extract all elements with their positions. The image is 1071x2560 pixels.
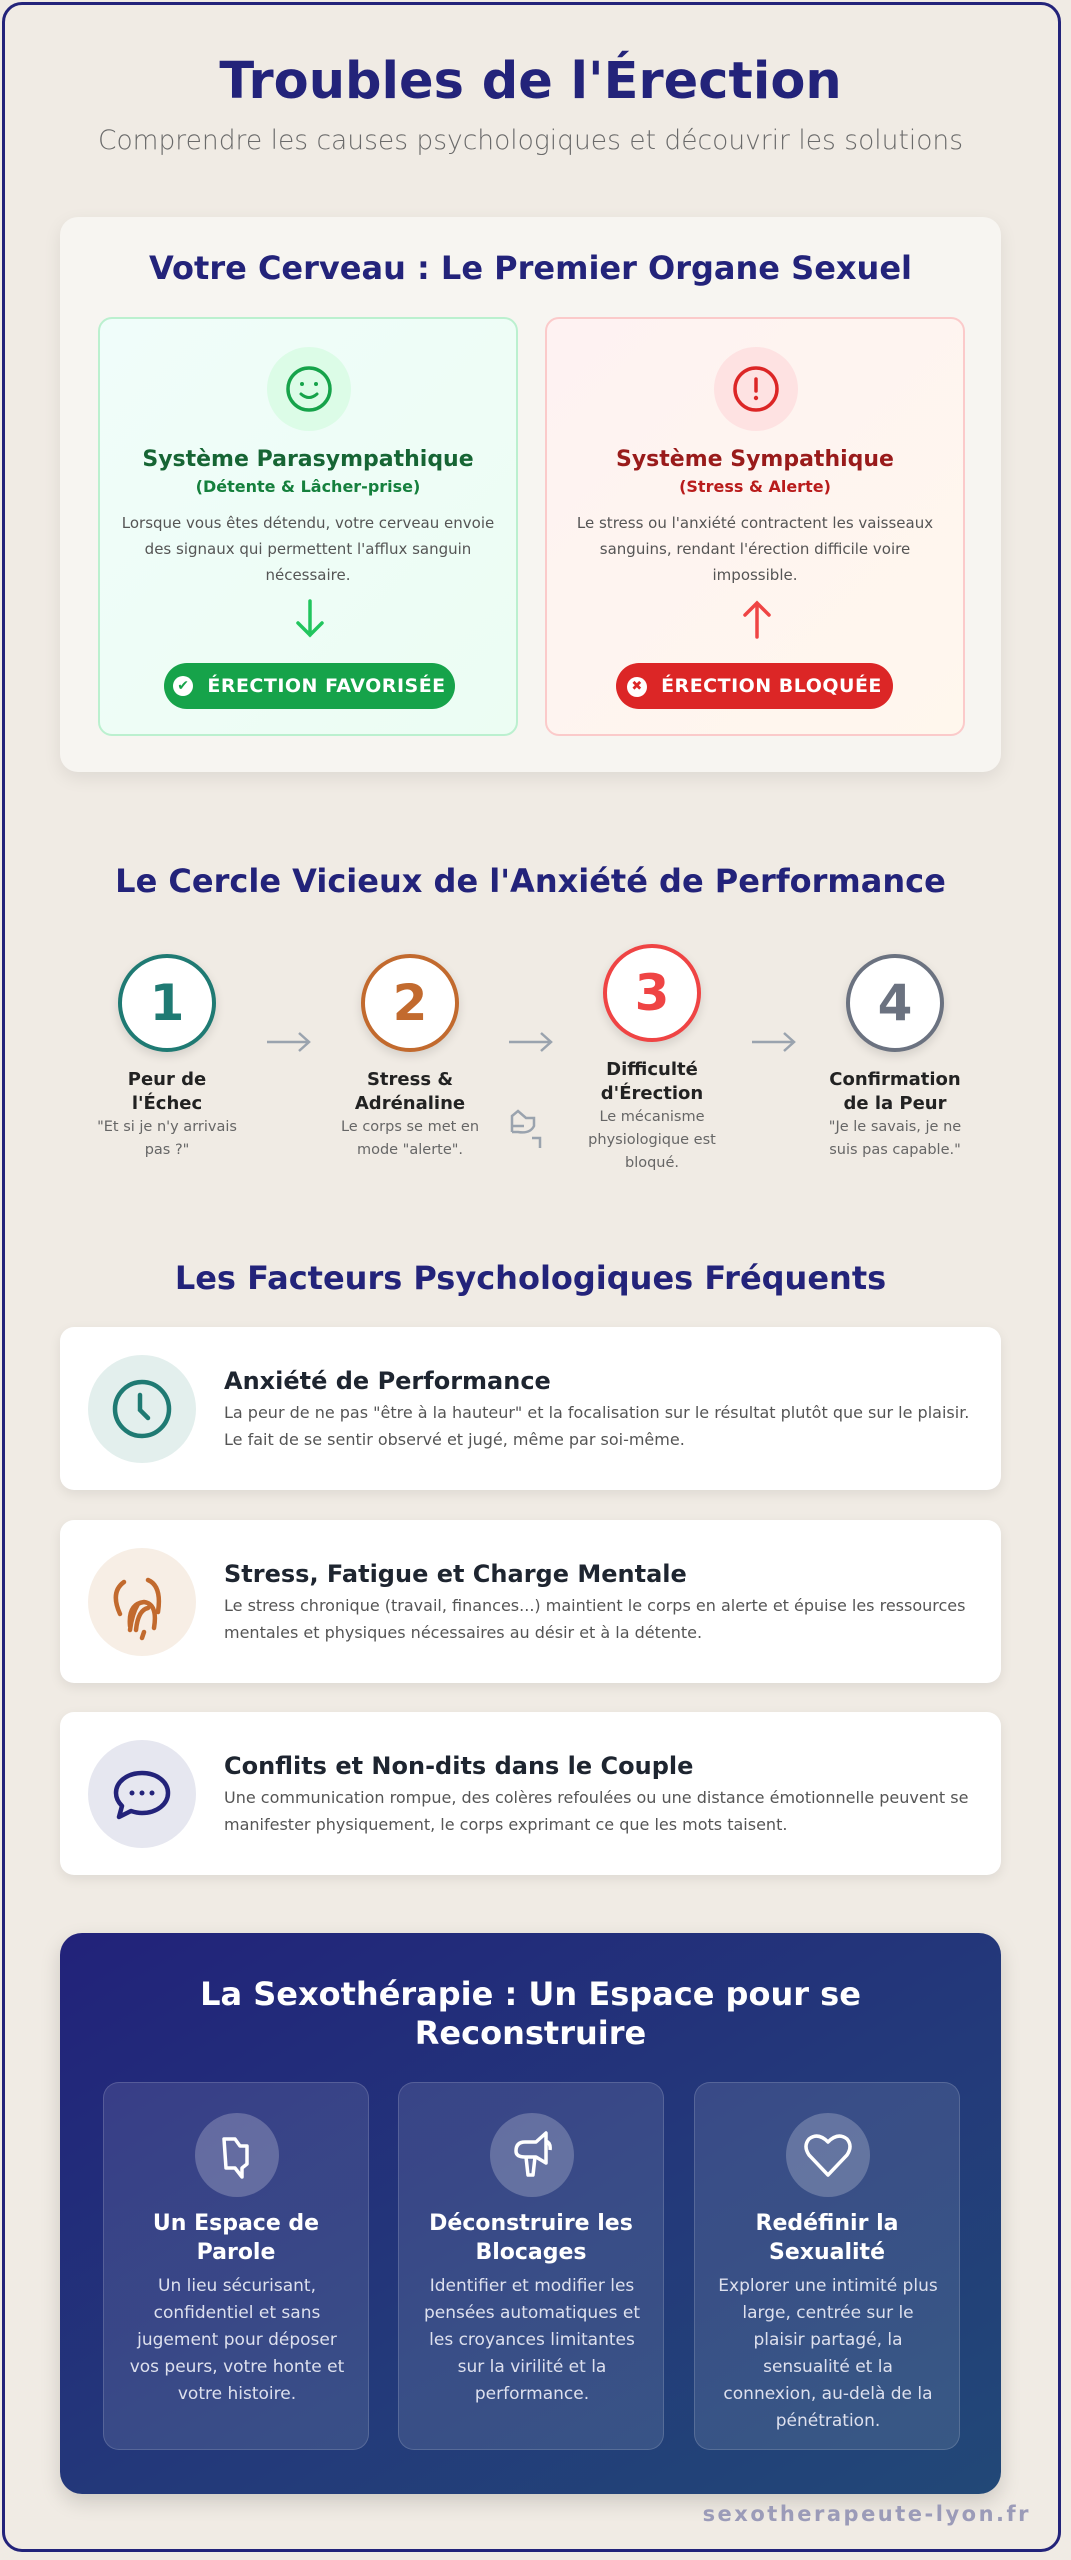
step 3: Le mécanisme physiologique est bloqué. (588, 1109, 716, 1171)
step 3: d'Érection (601, 1083, 703, 1104)
step 4: "Je le savais, je ne suis pas capable." (829, 1119, 961, 1158)
icon: smiley (267, 347, 351, 431)
button: favorisée: ÉRECTION FAVORISÉE (207, 675, 446, 697)
card: blocages: Identifier et modifier les pensées automatiques et les croyances limitantes sur la virilité et la performance. (424, 2276, 640, 2404)
factor card 1 (60, 1327, 1001, 1490)
text: sympathetic: (Stress & Alerte) (679, 477, 831, 496)
icon: alert (714, 347, 798, 431)
step 4: 4 (878, 974, 912, 1032)
icon: loop (510, 1110, 542, 1148)
arrow: up (743, 600, 771, 639)
heading: sexotherapy (200, 1975, 861, 2052)
text: parasympathetic: Lorsque vous êtes détendu, votre cerveau envoie des signaux qui permettent l'afflux sanguin nécessaire. (122, 514, 494, 584)
factor card 2 (60, 1520, 1001, 1683)
button: bloquée: ÉRECTION BLOQUÉE (661, 675, 882, 697)
step 3: Difficulté (606, 1059, 698, 1080)
step 2 (341, 954, 479, 1158)
factor card 2: Le stress chronique (travail, finances...) maintient le corps en alerte et épuise les ressources mentales et physiques nécessaires au désir et à la détente. (224, 1596, 965, 1642)
card: blocages: Blocages (475, 2240, 587, 2265)
panel: brain (60, 217, 1001, 772)
step 1: "Et si je n'y arrivais pas ?" (97, 1119, 237, 1158)
heading: sexotherapy: Reconstruire (415, 2014, 646, 2052)
factor card 2: Stress, Fatigue et Charge Mentale (224, 1560, 687, 1588)
icon: megaphone (490, 2113, 574, 2197)
footer: website: sexotherapeute-lyon.fr (703, 2502, 1031, 2526)
card: parole (103, 2082, 369, 2450)
step 2: Stress & (367, 1069, 453, 1090)
subtitle: Comprendre les causes psychologiques et découvrir les solutions (98, 125, 963, 156)
step 4: Confirmation (829, 1069, 961, 1090)
factor card 3: Conflits et Non-dits dans le Couple (224, 1752, 693, 1780)
icon: speech (195, 2113, 279, 2197)
title: Troubles de l'Érection (219, 52, 842, 111)
icon: chat (88, 1740, 196, 1848)
card: sexualité: Sexualité (769, 2240, 885, 2265)
step 1: 1 (150, 974, 184, 1032)
card: parole: Parole (197, 2240, 275, 2265)
text: sympathetic (577, 447, 933, 584)
text: sympathetic: Système Sympathique (616, 447, 894, 472)
factor card 1: La peur de ne pas "être à la hauteur" et la focalisation sur le résultat plutôt que sur le plaisir. Le fait de se sentir observé et jugé, même par soi-même. (224, 1403, 969, 1449)
card: sexualité: Redéfinir la (756, 2211, 898, 2236)
button: favorisée (164, 663, 455, 709)
card: parasympathetic (98, 317, 518, 736)
step 3 (588, 944, 716, 1171)
step 3: 3 (635, 964, 669, 1022)
heading: sexotherapy: La Sexothérapie : Un Espace pour se (200, 1975, 861, 2013)
card: sexualité (694, 2082, 960, 2450)
arrow 3 (752, 1032, 796, 1052)
icon: brain (88, 1548, 196, 1656)
step 1 (97, 954, 237, 1158)
icon: clock (88, 1355, 196, 1463)
button: favorisée: ✔ (177, 678, 189, 694)
factor card 3 (60, 1712, 1001, 1875)
card: blocages: Déconstruire les (429, 2211, 633, 2236)
card: sexualité: Explorer une intimité plus large, centrée sur le plaisir partagé, la sensualité et la connexion, au-delà de la pénétration. (718, 2276, 938, 2431)
step 2: Adrénaline (355, 1093, 465, 1114)
text: parasympathetic: (Détente & Lâcher-prise) (196, 477, 420, 496)
step 1: l'Échec (132, 1093, 202, 1114)
step 2: Le corps se met en mode "alerte". (341, 1119, 479, 1158)
button: bloquée: ✖ (631, 679, 643, 694)
step 4 (829, 954, 961, 1158)
card: blocages (398, 2082, 664, 2450)
button: bloquée (616, 663, 893, 709)
step 2: 2 (393, 974, 427, 1032)
text: sympathetic: Le stress ou l'anxiété contractent les vaisseaux sanguins, rendant l'érection difficile voire impossible. (577, 514, 933, 584)
arrow: down (296, 599, 324, 638)
heading: brain: Votre Cerveau : Le Premier Organe Sexuel (149, 249, 912, 287)
heading: vicious circle: Le Cercle Vicieux de l'Anxiété de Performance (115, 862, 946, 900)
icon: heart (786, 2113, 870, 2197)
text: parasympathetic: Système Parasympathique (142, 447, 474, 472)
arrow 2 (509, 1032, 553, 1052)
panel: sexotherapy (60, 1933, 1001, 2494)
card: sympathetic (545, 317, 965, 736)
factor card 1: Anxiété de Performance (224, 1367, 551, 1395)
card: parole: Un lieu sécurisant, confidentiel et sans jugement pour déposer vos peurs, votre honte et votre histoire. (130, 2276, 344, 2404)
text: parasympathetic (122, 447, 494, 584)
step 4: de la Peur (843, 1093, 947, 1114)
card: parole: Un Espace de (153, 2211, 319, 2236)
heading: factors: Les Facteurs Psychologiques Fréquents (175, 1259, 886, 1297)
step 1: Peur de (128, 1069, 206, 1090)
factor card 3: Une communication rompue, des colères refoulées ou une distance émotionnelle peuvent se manifester physiquement, le corps exprimant ce que les mots taisent. (224, 1788, 968, 1834)
arrow 1 (267, 1032, 311, 1052)
